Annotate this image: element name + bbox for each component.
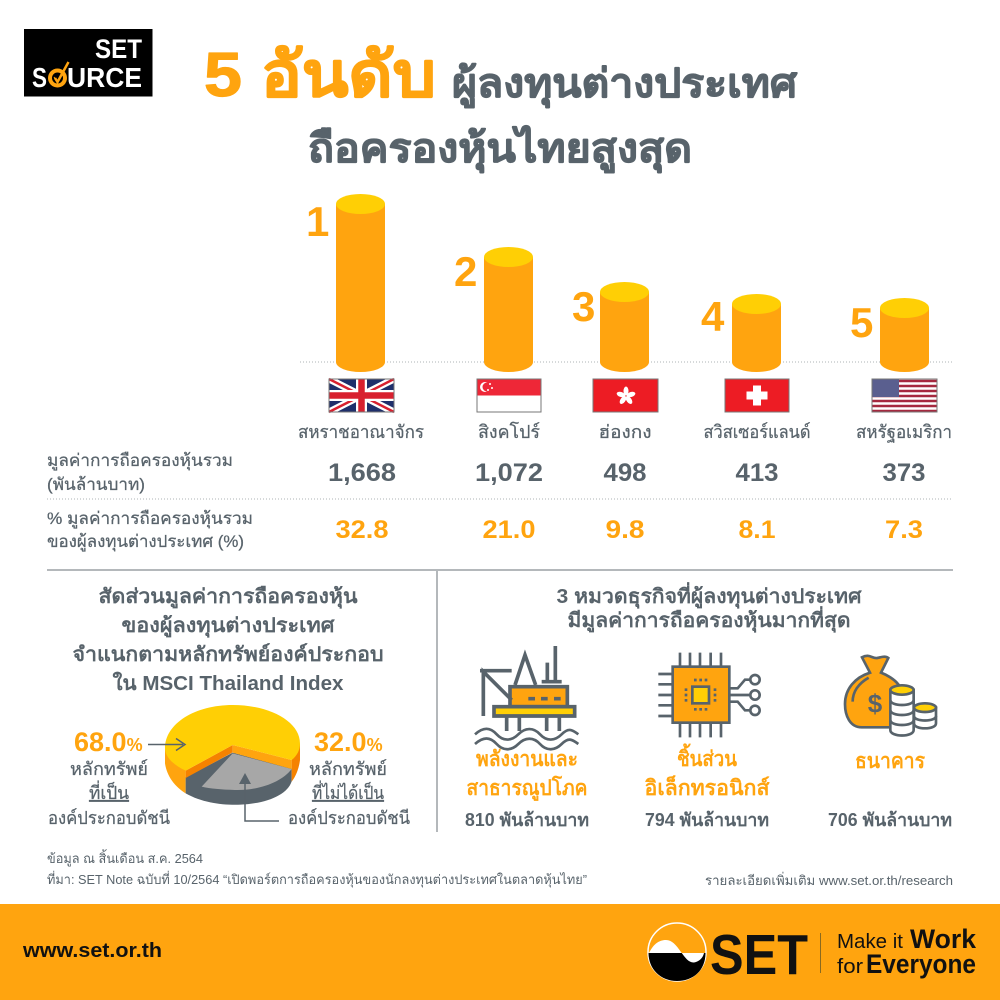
label: 32.0% non-constituent: ที่ไม่ได้เป็น <box>312 780 384 803</box>
flag: Switzerland <box>725 379 789 412</box>
cylinder 2: 2 <box>454 248 477 295</box>
dotted divider <box>47 498 953 500</box>
flag: United Kingdom <box>329 379 394 412</box>
label: 32.0% non-constituent: หลักทรัพย์ <box>309 759 387 779</box>
cylinder 3: 3 <box>572 283 595 330</box>
arrow: to grey slice <box>239 773 279 821</box>
logo: SET Source <box>24 29 152 96</box>
row values: total holding value: 1,668 <box>328 459 396 487</box>
label: 32.0% non-constituent <box>288 727 410 828</box>
row values: percent share: 32.8 <box>336 516 389 544</box>
sector: banking: ธนาคาร <box>855 750 926 773</box>
logo: SET: for <box>837 956 863 978</box>
section dividers <box>47 570 953 832</box>
sector: electronic components: 794 พันล้านบาท <box>645 810 769 830</box>
source notes <box>47 849 587 888</box>
row values: total holding value: 1,072 <box>475 459 543 487</box>
logo: SET <box>648 923 977 987</box>
sector: banking <box>828 750 952 830</box>
heading: MSCI share: จำแนกตามหลักทรัพย์องค์ประกอบ <box>72 643 384 666</box>
row values: percent share: 21.0 <box>482 516 536 544</box>
heading: top three sectors: มีมูลค่าการถือครองหุ้นมากที่สุด <box>568 605 850 634</box>
logo: SET Source: SET <box>95 34 142 64</box>
row label: total holding value <box>47 451 233 494</box>
row values: total holding value: 498 <box>604 459 647 487</box>
sector: energy <box>465 748 589 830</box>
cylinder 1 <box>306 194 385 372</box>
country names <box>298 421 952 443</box>
country names: ฮ่องกง <box>598 422 652 442</box>
flag: United States <box>872 379 937 412</box>
logo: SET Source: S <box>32 62 47 93</box>
row label: total holding value: (พันล้านบาท) <box>47 475 145 494</box>
row label: percent share: ของผู้ลงทุนต่างประเทศ (%) <box>47 532 244 552</box>
website: www.set.or.th <box>22 939 162 962</box>
row label: total holding value: มูลค่าการถือครองหุ้นรวม <box>47 451 233 471</box>
sector: electronic components: อิเล็กทรอนิกส์ <box>644 774 770 800</box>
label: 68.0% constituent: 68.0% <box>74 727 143 757</box>
heading: MSCI share: สัดส่วนมูลค่าการถือครองหุ้น <box>98 585 358 610</box>
dotted baseline <box>300 361 953 363</box>
logo: SET Source: URCE <box>67 62 142 93</box>
row label: percent share: % มูลค่าการถือครองหุ้นรวม <box>47 509 253 529</box>
pie chart <box>165 705 300 805</box>
country names: สหราชอาณาจักร <box>298 422 424 442</box>
cylinder 2 <box>454 247 533 372</box>
logo: SET: SET <box>710 923 808 987</box>
sector: banking: 706 พันล้านบาท <box>828 810 952 830</box>
logo: SET: Work <box>910 924 977 954</box>
sector: electronic components <box>644 743 770 830</box>
title: ผู้ลงทุนต่างประเทศ <box>452 62 798 109</box>
icon: money bag and coins: $ <box>868 689 883 719</box>
heading: top three sectors: 3 หมวดธุรกิจที่ผู้ลงทุนต่างประเทศ <box>556 581 863 610</box>
title <box>204 41 798 174</box>
icon: microchip <box>658 653 760 737</box>
country names: สวิสเซอร์แลนด์ <box>704 422 810 442</box>
icon: money bag and coins <box>845 656 936 735</box>
label: 68.0% constituent: ที่เป็น <box>89 780 129 803</box>
arrow: to yellow slice <box>148 738 185 750</box>
flag: Hong Kong <box>593 379 658 412</box>
heading: top three sectors <box>556 581 863 634</box>
row values: total holding value: 413 <box>736 459 778 487</box>
heading: MSCI share: ของผู้ลงทุนต่างประเทศ <box>122 614 336 639</box>
cylinder 1: 1 <box>306 198 329 245</box>
cylinder 4: 4 <box>701 293 725 340</box>
footer band <box>0 904 1000 1000</box>
title: 5 อันดับ <box>204 41 436 110</box>
row values: total holding value: 373 <box>882 459 926 487</box>
label: 68.0% constituent <box>48 727 170 828</box>
row values: percent share: 8.1 <box>738 516 776 544</box>
icon: oil platform <box>475 646 578 749</box>
heading: MSCI share <box>72 585 384 695</box>
row label: percent share <box>47 509 253 552</box>
country names: สหรัฐอเมริกา <box>856 422 952 443</box>
row values: percent share <box>336 516 923 544</box>
label: 68.0% constituent: องค์ประกอบดัชนี <box>48 808 170 828</box>
bar chart: cylinders <box>306 194 929 372</box>
row values: percent share: 9.8 <box>606 516 645 544</box>
source notes: ข้อมูล ณ สิ้นเดือน ส.ค. 2564 <box>47 849 203 867</box>
sector: energy: พลังงานและ <box>476 748 578 771</box>
row values: total holding value <box>328 459 926 487</box>
label: 32.0% non-constituent: องค์ประกอบดัชนี <box>288 808 410 828</box>
label: 32.0% non-constituent: 32.0% <box>314 727 383 757</box>
country names: สิงคโปร์ <box>478 421 540 442</box>
cylinder 4 <box>701 293 781 372</box>
more info link: รายละเอียดเพิ่มเติม www.set.or.th/research <box>705 872 953 888</box>
cylinder 5 <box>850 298 929 372</box>
flag: Singapore <box>477 379 541 412</box>
source notes: ที่มา: SET Note ฉบับที่ 10/2564 “เปิดพอร์ตการถือครองหุ้นของนักลงทุนต่างประเทศในตลาดหุ้นไทย” <box>47 871 587 888</box>
row values: percent share: 7.3 <box>885 516 923 544</box>
logo: SET: Make it <box>837 931 903 953</box>
sector: energy: 810 พันล้านบาท <box>465 810 589 830</box>
label: 68.0% constituent: หลักทรัพย์ <box>70 759 148 779</box>
logo: SET: Everyone <box>866 949 976 979</box>
sector: electronic components: ชิ้นส่วน <box>677 743 738 771</box>
sector: energy: สาธารณูปโภค <box>466 775 588 802</box>
cylinder 3 <box>572 282 649 372</box>
cylinder 5: 5 <box>850 299 873 346</box>
heading: MSCI share: ใน MSCI Thailand Index <box>112 671 344 695</box>
title: ถือครองหุ้นไทยสูงสุด <box>308 125 692 174</box>
